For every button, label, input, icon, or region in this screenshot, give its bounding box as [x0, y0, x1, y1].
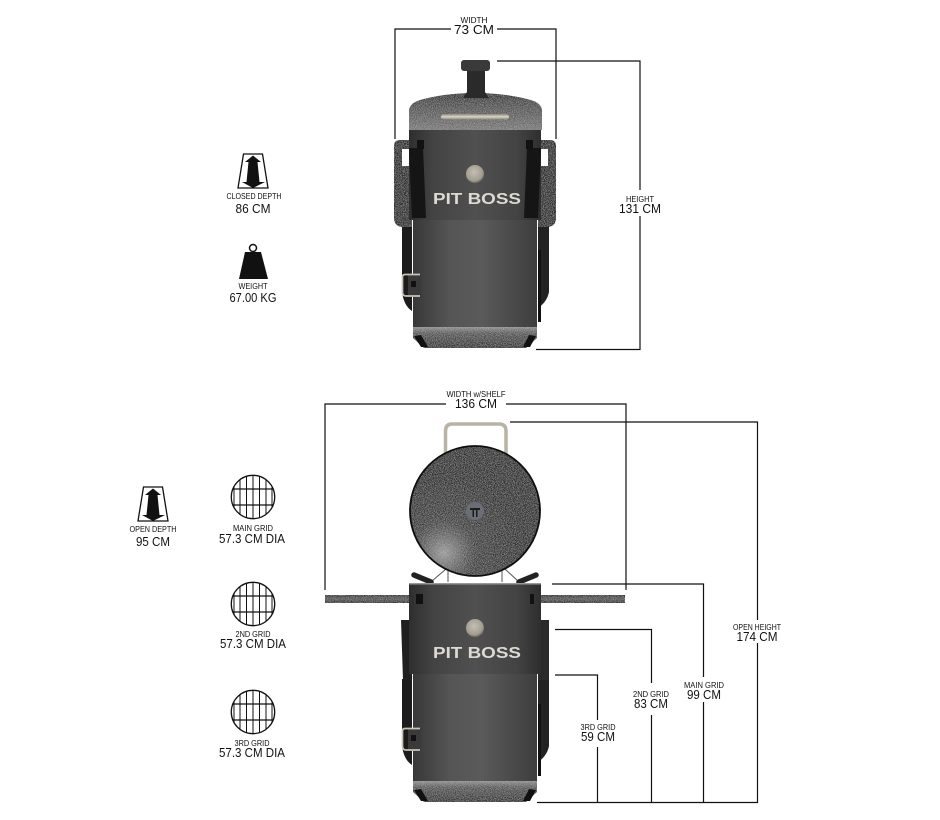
lid handle: [446, 424, 506, 455]
spec: weight: [230, 244, 276, 305]
dimension: main grid height: MAIN GRID: [684, 680, 724, 690]
upper body: [409, 583, 541, 674]
spec: open depth: OPEN DEPTH: [130, 524, 176, 534]
spec: 3rd grid: 57.3 CM DIA: [219, 745, 285, 760]
spec: closed depth: 86 CM: [236, 201, 270, 216]
lid disc: [410, 446, 540, 576]
dimension: 2nd grid height: 83 CM: [634, 696, 668, 711]
open grill lower body: [402, 673, 549, 802]
support struts: [414, 569, 536, 582]
dimension: open height: 174 CM: [736, 629, 778, 644]
leg upper right: [538, 620, 549, 680]
dimension: 3rd grid height: 59 CM: [581, 729, 615, 744]
dimension: main grid height: 99 CM: [687, 687, 721, 702]
shelf right: [531, 595, 625, 603]
spec: main grid: [219, 474, 285, 546]
spec: main grid: MAIN GRID: [233, 523, 273, 533]
spec: closed depth: [226, 154, 282, 216]
dimension: width with shelf: 136 CM: [455, 396, 497, 411]
chimney cap: [461, 60, 490, 71]
lid: [409, 93, 542, 130]
lid disc rim: [410, 446, 540, 576]
side bracket right: [527, 140, 556, 227]
spec: 3rd grid: 3RD GRID: [234, 738, 270, 748]
dimension: open height: [510, 422, 781, 802]
leg upper left: [401, 620, 412, 680]
closed grill lower body: [402, 219, 549, 348]
knob mark: [470, 508, 480, 517]
side bracket left: [394, 140, 423, 227]
spec: weight: WEIGHT: [238, 281, 268, 291]
dimension: width with shelf: [325, 389, 626, 590]
dimension: width: 73 CM: [454, 22, 494, 37]
dimension: main grid height: [552, 584, 724, 802]
spec: open depth: 95 CM: [136, 534, 170, 549]
spec: closed depth: CLOSED DEPTH: [226, 191, 282, 201]
lid knob: [466, 502, 484, 520]
dimension: height: 131 CM: [619, 201, 661, 216]
spec: 2nd grid: [220, 581, 286, 651]
spec: 2nd grid: 2ND GRID: [236, 629, 270, 639]
gauge: [466, 165, 484, 183]
dimension: 3rd grid height: [555, 675, 616, 802]
spec: 3rd grid: [219, 689, 285, 760]
shelf left: [325, 595, 419, 603]
spec: open depth: [130, 487, 176, 549]
body top edge: [409, 583, 541, 584]
closed grill illustration: [394, 60, 556, 348]
spec: weight: 67.00 KG: [230, 290, 276, 305]
dimension: width: WIDTH: [460, 15, 488, 25]
dimension: open height: OPEN HEIGHT: [733, 622, 781, 632]
upper body: [409, 130, 541, 220]
dimension: width: [395, 15, 556, 139]
dimension: 2nd grid height: [555, 630, 669, 802]
gauge: [466, 619, 484, 637]
dimension: width with shelf: WIDTH w/SHELF: [446, 389, 506, 399]
dimension: height: HEIGHT: [626, 194, 654, 204]
dimension: height: [497, 61, 661, 350]
brand logo: PIT BOSS: [433, 645, 521, 662]
spec: 2nd grid: 57.3 CM DIA: [220, 636, 286, 651]
open grill illustration: [325, 424, 625, 802]
dimension: 2nd grid height: 2ND GRID: [633, 689, 669, 699]
bracket top blocks: [417, 140, 533, 149]
brand logo: PIT BOSS: [433, 191, 521, 208]
dimension: 3rd grid height: 3RD GRID: [580, 722, 616, 732]
chimney stem: [463, 70, 489, 98]
shadow wedges: [409, 148, 541, 218]
spec: main grid: 57.3 CM DIA: [219, 531, 285, 546]
shelf brackets: [416, 594, 534, 604]
lid handle: [441, 114, 509, 120]
bracket white slots: [402, 149, 548, 166]
